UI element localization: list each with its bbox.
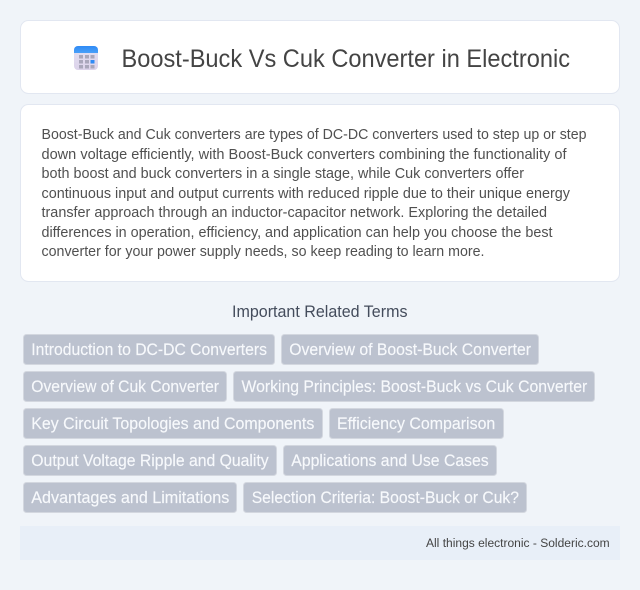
tag: output voltage ripple: Output Voltage Ripple and Quality <box>31 452 269 470</box>
tag: overview boost-buck: Overview of Boost-Buck Converter <box>289 341 532 359</box>
tag: efficiency comparison: Efficiency Comparison <box>337 415 495 433</box>
tag: selection criteria: Selection Criteria: Boost-Buck or Cuk? <box>252 489 519 507</box>
heading: important related terms: Important Related Terms <box>232 303 408 321</box>
text block: description: both boost and buck converters in a single stage, while Cuk converters offer <box>42 166 524 182</box>
text block: description: continuous input and output currents with reduced ripple due to their unique energy <box>42 186 571 202</box>
panel: related terms tags <box>24 334 594 512</box>
text block: description: Boost-Buck and Cuk converters are types of DC-DC converters used to step up or step <box>42 127 586 143</box>
tag: key circuit topologies <box>24 408 322 438</box>
tag: overview cuk: Overview of Cuk Converter <box>31 378 220 396</box>
footer <box>20 526 620 560</box>
tag: key circuit topologies: Key Circuit Topologies and Components <box>31 415 314 433</box>
icon: calendar <box>74 46 98 70</box>
tag: applications <box>284 446 496 476</box>
text block: description: transfer approach through an inductor-capacitor network. Exploring the detailed <box>42 205 547 221</box>
text block: description: converter for your power supply needs, so keep reading to learn more. <box>42 244 484 260</box>
tag: selection criteria <box>244 482 526 512</box>
text block: description <box>42 127 586 260</box>
tag: introduction <box>24 334 274 364</box>
tag: efficiency comparison <box>330 408 504 438</box>
tag: working principles: Working Principles: Boost-Buck vs Cuk Converter <box>242 378 588 396</box>
tag: advantages <box>24 482 236 512</box>
tag: applications: Applications and Use Cases <box>291 452 489 470</box>
tag: overview cuk <box>24 372 226 402</box>
tag: working principles <box>234 372 594 402</box>
text block: description: differences in operation, efficiency, and application can help you choose the best <box>42 225 552 241</box>
tag: introduction: Introduction to DC-DC Converters <box>31 341 267 359</box>
footer: All things electronic - Solderic.com <box>426 536 610 550</box>
tag: advantages: Advantages and Limitations <box>31 489 229 507</box>
panel: description card <box>20 104 620 282</box>
text block: description: down voltage efficiently, with Boost-Buck converters combining the functionality of <box>42 147 567 163</box>
tag: output voltage ripple <box>24 446 276 476</box>
panel: header card <box>20 20 620 94</box>
tag: overview boost-buck <box>282 334 538 364</box>
title: Boost-Buck Vs Cuk Converter in Electronic <box>122 45 570 73</box>
